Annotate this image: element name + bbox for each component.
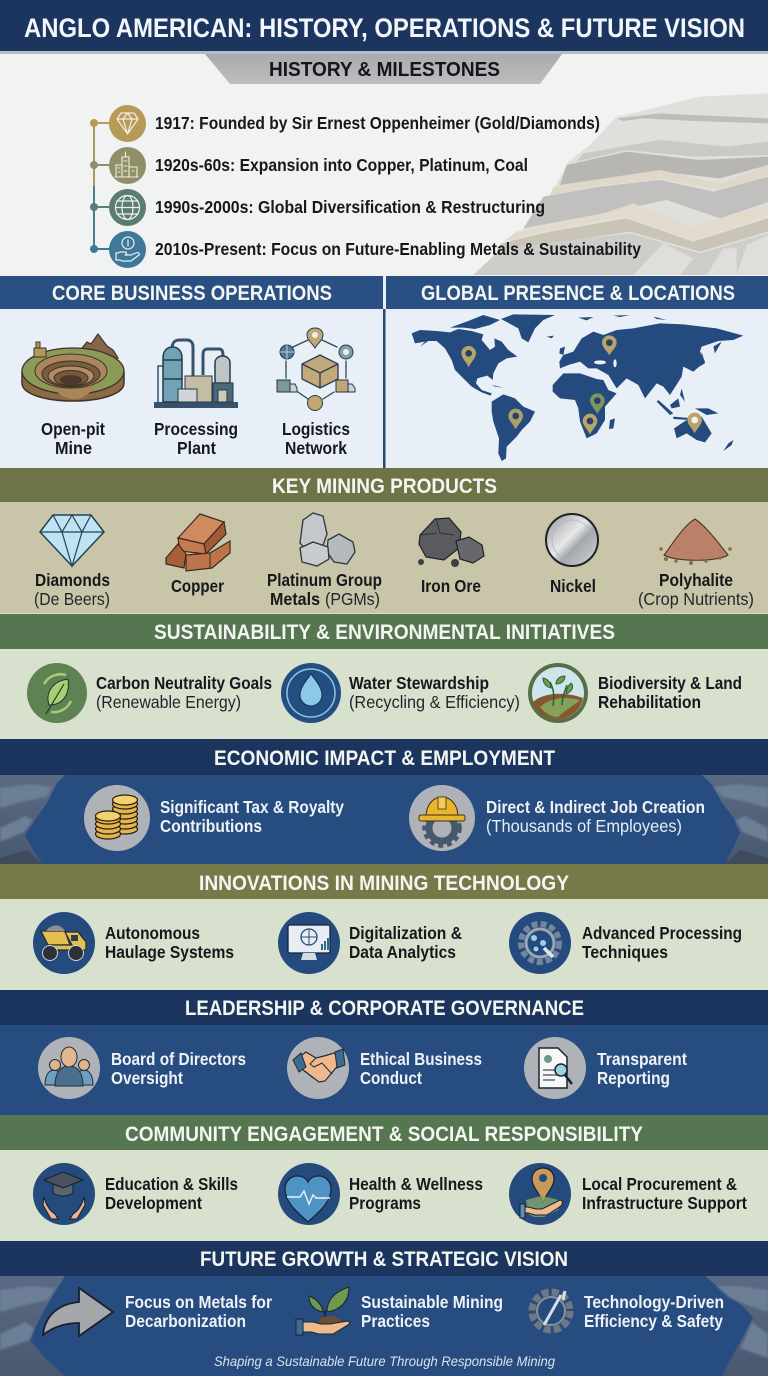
milestone: 1920s-60s <box>109 147 528 184</box>
panel: community engagement and social responsibility <box>0 1115 768 1241</box>
rock edge: left <box>0 775 65 864</box>
item: carbon neutrality goals: (Renewable Energy) <box>96 692 241 712</box>
title banner <box>0 0 768 54</box>
heading ribbon: history and milestones <box>205 54 562 84</box>
timeline connector <box>90 119 110 253</box>
label: processing plant: Plant <box>177 438 216 458</box>
product: polyhalite <box>638 519 754 609</box>
label: processing plant <box>154 419 238 458</box>
panel: history and milestones <box>0 54 768 276</box>
heading: leadership: LEADERSHIP & CORPORATE GOVERNANCE <box>185 997 584 1020</box>
label: open-pit mine: Mine <box>55 438 92 458</box>
item: technology-driven efficiency and safety: Efficiency & Safety <box>584 1311 723 1331</box>
item: ethical business conduct <box>287 1037 482 1099</box>
item: health and wellness programs <box>278 1163 483 1225</box>
item: focus on metals for decarbonization: Decarbonization <box>125 1311 246 1331</box>
item: biodiversity and land rehabilitation: Biodiversity & Land <box>598 673 742 693</box>
item: board of directors oversight: Board of Directors <box>111 1049 246 1069</box>
heading: innovations: INNOVATIONS IN MINING TECHNOLOGY <box>199 872 569 895</box>
item: technology-driven efficiency and safety: Technology-Driven <box>584 1292 724 1312</box>
heading: economic impact: ECONOMIC IMPACT & EMPLOYMENT <box>214 747 555 770</box>
item: direct and indirect job creation <box>409 785 705 851</box>
panel: global presence and locations <box>383 276 768 468</box>
item: advanced processing techniques <box>509 912 742 974</box>
milestone: 1917 <box>109 105 600 142</box>
item: board of directors oversight <box>38 1037 246 1099</box>
item: advanced processing techniques: Techniques <box>582 942 668 962</box>
item: autonomous haulage systems: Haulage Systems <box>105 942 234 962</box>
item: sustainable mining practices <box>296 1287 503 1335</box>
item: focus on metals for decarbonization: Focus on Metals for <box>125 1292 272 1312</box>
label: logistics network <box>282 419 350 458</box>
item: education and skills development <box>33 1163 238 1225</box>
panel: leadership and corporate governance <box>0 990 768 1115</box>
world map <box>412 314 743 461</box>
milestone: 1990s-2000s <box>109 189 545 226</box>
item: local procurement and infrastructure support: Local Procurement & <box>582 1174 737 1194</box>
icon: processing plant <box>154 340 238 408</box>
panel: economic impact and employment <box>0 739 768 864</box>
heading: key mining products: KEY MINING PRODUCTS <box>272 475 497 498</box>
tagline: Shaping a Sustainable Future Through Responsible Mining <box>214 1353 555 1369</box>
product: diamonds: Diamonds <box>35 570 110 590</box>
product: nickel <box>546 514 598 596</box>
product: platinum group metals: Metals <box>270 589 320 609</box>
item: biodiversity and land rehabilitation <box>528 663 742 723</box>
panel: sustainability and environmental initiatives <box>0 613 768 739</box>
milestone: 2010s-present: 2010s-Present: Focus on Future-Enabling Metals & Sustainability <box>155 239 641 259</box>
item: sustainable mining practices: Practices <box>361 1311 430 1331</box>
item: health and wellness programs: Programs <box>349 1193 421 1213</box>
item: tax and royalty contributions: Significant Tax & Royalty <box>160 797 344 817</box>
product: platinum group metals: Platinum Group <box>267 570 382 590</box>
panel: key mining products <box>0 468 768 613</box>
item: direct and indirect job creation: (Thousands of Employees) <box>486 816 682 836</box>
product: platinum group metals: (PGMs) <box>325 589 380 609</box>
product: polyhalite: Polyhalite <box>659 570 733 590</box>
item: local procurement and infrastructure support: Infrastructure Support <box>582 1193 747 1213</box>
heading: future growth: FUTURE GROWTH & STRATEGIC VISION <box>200 1248 568 1271</box>
illustration: rock strata <box>473 93 768 275</box>
item: digitalization and data analytics: Digitalization & <box>349 923 462 943</box>
label: processing plant: Processing <box>154 419 238 439</box>
product: platinum group metals <box>267 513 382 609</box>
product: copper: Copper <box>171 576 224 596</box>
milestone: 2010s-present <box>109 231 641 268</box>
product: iron ore <box>418 518 484 596</box>
item: tax and royalty contributions: Contributions <box>160 816 262 836</box>
map pins <box>461 335 702 434</box>
item: board of directors oversight: Oversight <box>111 1068 183 1088</box>
item: ethical business conduct: Ethical Business <box>360 1049 482 1069</box>
milestone: 1990s-2000s: 1990s-2000s: Global Diversification & Restructuring <box>155 197 545 217</box>
item: water stewardship <box>281 663 520 723</box>
panel: future growth and strategic vision <box>0 1241 768 1376</box>
milestone: 1917: 1917: Founded by Sir Ernest Oppenheimer (Gold/Diamonds) <box>155 113 600 133</box>
icon: open-pit mine <box>22 334 124 401</box>
label: logistics network: Network <box>285 438 347 458</box>
product: polyhalite: (Crop Nutrients) <box>638 589 754 609</box>
item: education and skills development: Education & Skills <box>105 1174 238 1194</box>
panel: innovations in mining technology <box>0 864 768 990</box>
heading: sustainability: SUSTAINABILITY & ENVIRONMENTAL INITIATIVES <box>154 621 615 644</box>
item: health and wellness programs: Health & Wellness <box>349 1174 483 1194</box>
label: open-pit mine: Open-pit <box>41 419 105 439</box>
heading: community: COMMUNITY ENGAGEMENT & SOCIAL RESPONSIBILITY <box>125 1123 643 1146</box>
heading ribbon: history and milestones: HISTORY & MILESTONES <box>269 59 500 81</box>
rock edge: left <box>0 1276 65 1376</box>
item: transparent reporting: Transparent <box>597 1049 687 1069</box>
item: carbon neutrality goals: Carbon Neutrality Goals <box>96 673 272 693</box>
item: education and skills development: Development <box>105 1193 202 1213</box>
heading: core business operations: CORE BUSINESS OPERATIONS <box>52 282 332 305</box>
item: ethical business conduct: Conduct <box>360 1068 422 1088</box>
item: focus on metals for decarbonization <box>43 1288 272 1336</box>
item: autonomous haulage systems: Autonomous <box>105 923 200 943</box>
item: transparent reporting: Reporting <box>597 1068 670 1088</box>
item: digitalization and data analytics <box>278 912 462 974</box>
item: biodiversity and land rehabilitation: Rehabilitation <box>598 692 701 712</box>
product: iron ore: Iron Ore <box>421 576 481 596</box>
product: diamonds <box>34 515 110 609</box>
item: direct and indirect job creation: Direct & Indirect Job Creation <box>486 797 705 817</box>
label: open-pit mine <box>41 419 105 458</box>
item: technology-driven efficiency and safety <box>532 1291 724 1331</box>
item: transparent reporting <box>524 1037 687 1099</box>
product: nickel: Nickel <box>550 576 596 596</box>
item: water stewardship: (Recycling & Efficiency) <box>349 692 520 712</box>
icon: logistics network <box>277 328 355 410</box>
milestone: 1920s-60s: 1920s-60s: Expansion into Copper, Platinum, Coal <box>155 155 528 175</box>
item: water stewardship: Water Stewardship <box>349 673 489 693</box>
label: logistics network: Logistics <box>282 419 350 439</box>
product: copper <box>166 514 230 596</box>
item: sustainable mining practices: Sustainable Mining <box>361 1292 503 1312</box>
panel: core business operations <box>0 276 384 468</box>
item: autonomous haulage systems <box>33 912 234 974</box>
rock edge: right <box>705 1276 768 1376</box>
item: tax and royalty contributions <box>84 785 344 851</box>
item: digitalization and data analytics: Data Analytics <box>349 942 456 962</box>
item: advanced processing techniques: Advanced Processing <box>582 923 742 943</box>
item: carbon neutrality goals <box>27 663 272 723</box>
item: local procurement and infrastructure support <box>509 1163 747 1225</box>
rock edge: right <box>702 775 768 864</box>
product: diamonds: (De Beers) <box>34 589 110 609</box>
